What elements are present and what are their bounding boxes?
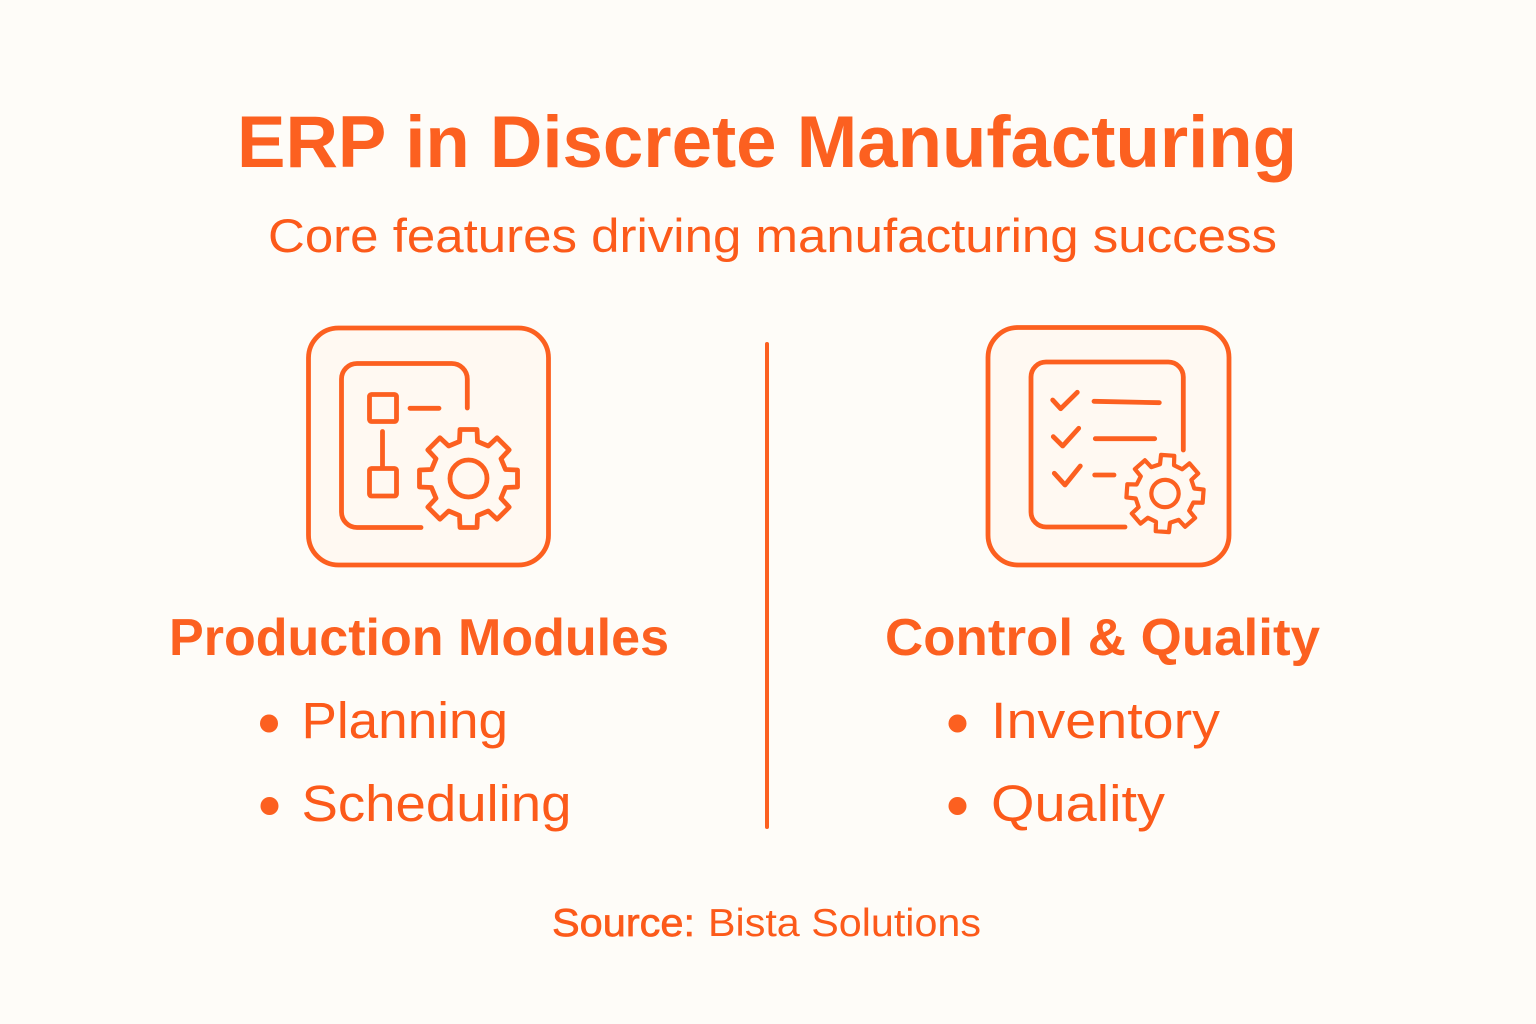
heading: production modules: Production Modules <box>169 609 669 667</box>
heading: control and quality: Control & Quality <box>885 609 1320 667</box>
center divider <box>765 342 769 829</box>
list item: inventory: Inventory <box>991 692 1221 749</box>
title: ERP in Discrete Manufacturing <box>237 100 1297 183</box>
source line <box>552 902 981 945</box>
panel: control and quality <box>885 328 1320 832</box>
icon: production flowchart with gear <box>308 328 548 565</box>
source line: Source: <box>552 902 695 945</box>
list item: scheduling: Scheduling <box>302 775 572 832</box>
list item: planning: Planning <box>302 692 508 749</box>
panel: production modules <box>169 328 669 832</box>
subtitle: Core features driving manufacturing success <box>268 209 1277 262</box>
source line: Bista Solutions <box>708 902 981 945</box>
list item: quality: Quality <box>991 775 1166 832</box>
icon: quality checklist with gear <box>988 328 1229 565</box>
